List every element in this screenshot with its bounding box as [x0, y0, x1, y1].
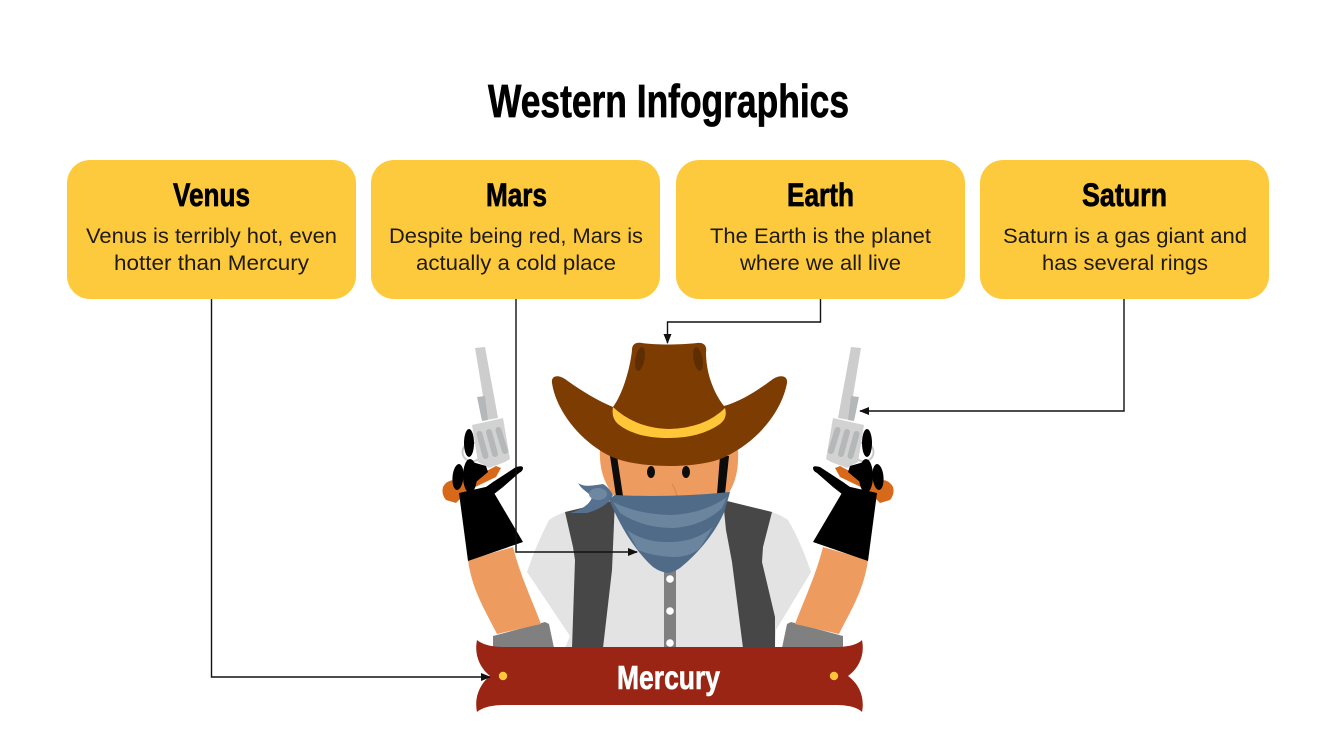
arm and revolver: right: [782, 347, 894, 648]
title: Western Infographics: [488, 75, 849, 127]
panel: Earth: Earth: [787, 177, 854, 213]
illustration: cowboy: [442, 343, 894, 649]
arrow: Earth to hat: [668, 299, 820, 343]
panel: Mars: actually a cold place: [416, 252, 616, 275]
arrow: Saturn to revolver: [860, 299, 1124, 411]
panel: Mars: Despite being red, Mars is: [389, 225, 643, 248]
panel: Earth: [676, 160, 965, 299]
arrow: Venus to banner: [212, 299, 490, 677]
panel: Earth: The Earth is the planet: [710, 225, 931, 248]
shirt: [527, 512, 811, 648]
panel: Mars: Mars: [486, 177, 547, 213]
panel: Mars: [371, 160, 660, 299]
arm and revolver: left: [442, 347, 554, 648]
panel: Earth: where we all live: [739, 252, 901, 275]
arrow: Mars to bandana: [516, 299, 637, 552]
panel: Saturn: Saturn is a gas giant and: [1003, 225, 1247, 248]
hat straps: [610, 456, 729, 496]
banner: Mercury: Mercury: [617, 659, 721, 696]
panel: Venus: hotter than Mercury: [114, 252, 310, 275]
eyes: [647, 466, 690, 478]
panel: Venus: Venus is terribly hot, even: [86, 225, 337, 248]
panel: Venus: [67, 160, 356, 299]
panel: Venus: Venus: [173, 177, 250, 213]
hat: [552, 343, 787, 466]
panel: Saturn: has several rings: [1042, 252, 1208, 275]
nose: [672, 484, 677, 497]
panel: Saturn: Saturn: [1082, 177, 1167, 213]
face: [600, 450, 738, 497]
panel: Saturn: [980, 160, 1269, 299]
vest: [565, 500, 775, 648]
banner: Mercury: [476, 640, 863, 712]
shirt placket: [664, 565, 676, 649]
bandana: [570, 483, 730, 573]
